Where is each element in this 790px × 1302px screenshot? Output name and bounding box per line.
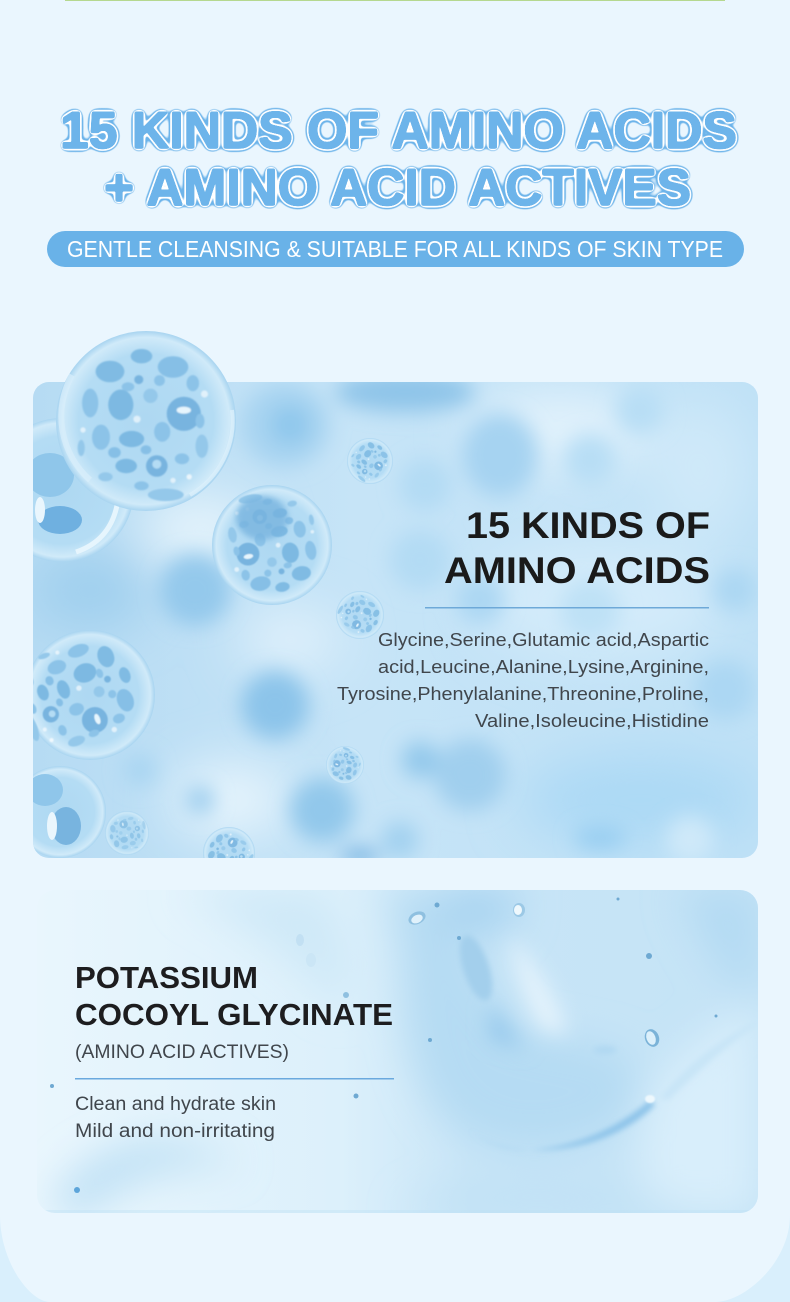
amino acid list bbox=[337, 629, 709, 731]
amino acid list: Tyrosine,Phenylalanine,Threonine,Proline, bbox=[337, 683, 709, 704]
panel heading: 15 KINDS OF bbox=[466, 505, 710, 546]
amino acid list: Glycine,Serine,Glutamic acid,Aspartic bbox=[378, 629, 709, 650]
title: 15 KINDS OF AMINO ACIDS bbox=[60, 102, 737, 160]
panel heading bbox=[75, 960, 393, 1032]
benefits: Clean and hydrate skin bbox=[75, 1094, 276, 1115]
benefits: Mild and non-irritating bbox=[75, 1121, 275, 1142]
panel heading: AMINO ACIDS bbox=[444, 550, 710, 591]
panel subheading: (AMINO ACID ACTIVES) bbox=[75, 1042, 289, 1063]
panel: potassium cocoyl glycinate bbox=[37, 890, 758, 1213]
title bbox=[60, 102, 737, 217]
panel image: blurred bubbles bbox=[0, 372, 760, 882]
panel: 15 kinds of amino acids bbox=[0, 331, 760, 882]
title: + AMINO ACID ACTIVES bbox=[104, 159, 691, 217]
left partial sphere bbox=[33, 418, 131, 560]
subtitle pill: GENTLE CLEANSING & SUITABLE FOR ALL KINDS OF SKIN TYPE bbox=[67, 236, 723, 262]
panel image: gel texture bbox=[37, 890, 758, 1213]
water droplets bbox=[50, 898, 718, 1193]
benefits bbox=[75, 1094, 276, 1142]
amino acid list: acid,Leucine,Alanine,Lysine,Arginine, bbox=[378, 656, 709, 677]
panel heading bbox=[444, 505, 710, 591]
bottom left sphere bbox=[33, 766, 106, 858]
amino acid list: Valine,Isoleucine,Histidine bbox=[475, 710, 709, 731]
sphere bbox=[33, 632, 155, 760]
big sphere overlapping panel top bbox=[56, 331, 236, 511]
panel heading: COCOYL GLYCINATE bbox=[75, 997, 393, 1032]
top green strip bbox=[65, 0, 725, 1]
sphere bbox=[212, 484, 332, 605]
panel heading: POTASSIUM bbox=[75, 960, 258, 995]
subtitle pill bbox=[47, 231, 744, 267]
small spheres bbox=[105, 436, 394, 882]
